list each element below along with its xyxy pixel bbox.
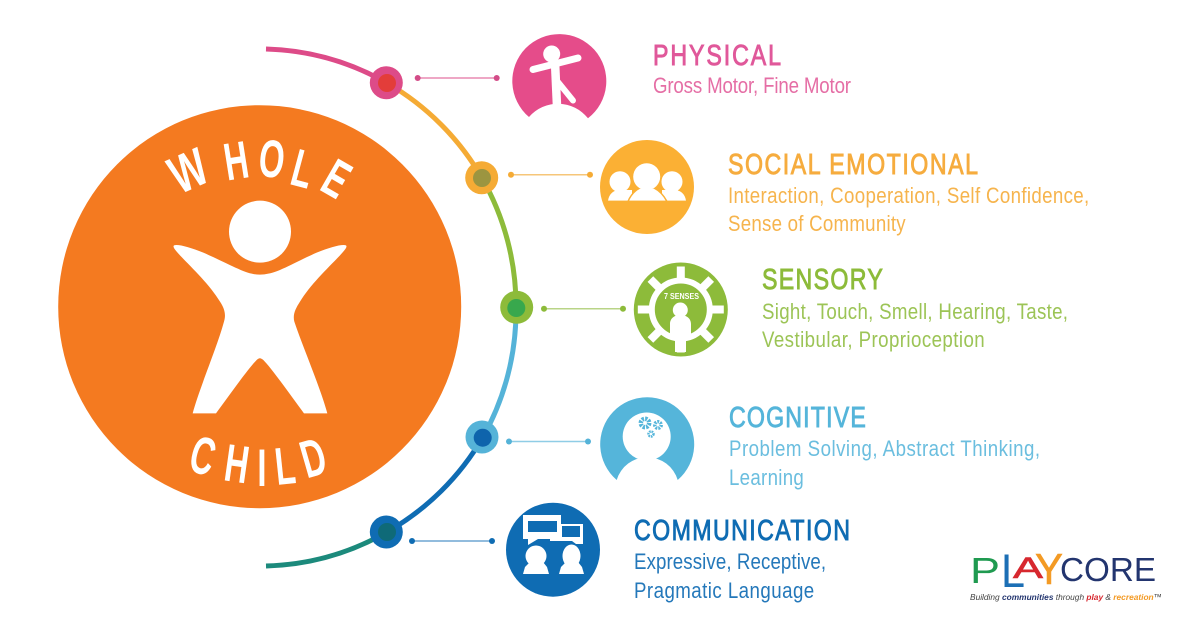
label: CHILD: H [221, 434, 253, 495]
connector: sensory [541, 306, 626, 312]
description: physical: Gross Motor, Fine Motor [653, 75, 851, 98]
connector: physical [415, 75, 500, 81]
description: cognitive: Problem Solving, Abstract Thinking, [729, 438, 1040, 461]
icon: physical [512, 34, 606, 118]
logo: PlayCore: A [1013, 552, 1043, 585]
icon: communication [506, 503, 600, 597]
heading: cognitive: COGNITIVE [729, 400, 866, 434]
icon label: 7 senses: 7 SENSES [664, 291, 699, 301]
arc: teal end [266, 532, 387, 566]
text: social emotional [728, 147, 1089, 236]
text: physical [653, 38, 851, 98]
child figure [174, 201, 346, 413]
node: communication [370, 516, 403, 548]
icon: cognitive [600, 397, 694, 480]
arc: physical [266, 49, 387, 83]
text: communication: Pragmatic Language [634, 580, 814, 603]
arc: social emotional [387, 83, 482, 178]
node: cognitive [466, 420, 498, 454]
icon: sensory [634, 262, 728, 356]
segmented arc with nodes [266, 49, 516, 566]
arc: sensory [482, 178, 516, 308]
arc: cognitive [483, 308, 516, 437]
text: communication [634, 513, 850, 603]
logo: PlayCore: Y [1035, 545, 1063, 594]
description: sensory: Sight, Touch, Smell, Hearing, Taste, [762, 301, 1068, 324]
arc: communication [387, 437, 483, 532]
text: sensory [762, 262, 1068, 352]
description: social emotional: Interaction, Cooperation, Self Confidence, [728, 185, 1089, 208]
whole child badge [58, 105, 461, 508]
text: cognitive [729, 400, 1040, 490]
heading: communication: COMMUNICATION [634, 513, 850, 547]
description: communication: Expressive, Receptive, [634, 551, 826, 574]
node: social emotional [465, 161, 498, 194]
label: CHILD: D [294, 427, 333, 490]
text: sensory: Vestibular, Proprioception [762, 329, 985, 352]
heading: social emotional: SOCIAL EMOTIONAL [728, 147, 978, 181]
label: WHOLE: H [220, 131, 253, 192]
label: CHILD: C [184, 425, 222, 488]
label: WHOLE: W [160, 136, 217, 205]
connector: cognitive [506, 438, 591, 444]
logo tagline: Building communities through play & recreation™ [970, 592, 1162, 602]
connector: communication [409, 538, 495, 544]
label: CHILD: I [257, 439, 267, 498]
label: WHOLE: O [256, 129, 288, 190]
node: physical [370, 66, 403, 99]
label: WHOLE [160, 129, 360, 210]
text: cognitive: Learning [729, 467, 804, 490]
label: WHOLE: L [285, 138, 320, 201]
logo: PlayCore [970, 544, 1162, 602]
heading: physical: PHYSICAL [653, 38, 781, 72]
label: WHOLE: E [312, 148, 360, 210]
heading: sensory: SENSORY [762, 262, 883, 296]
logo: PlayCore: CORE [1060, 551, 1156, 588]
icon: social emotional [600, 140, 694, 234]
connector: social emotional [508, 172, 593, 178]
label: CHILD [184, 425, 333, 498]
logo: PlayCore: P [970, 550, 1000, 591]
text: social emotional: Sense of Community [728, 213, 906, 236]
orange circle [58, 105, 461, 508]
logo: PlayCore: L [1001, 544, 1025, 597]
label: CHILD: L [272, 436, 298, 497]
node: sensory [500, 291, 533, 324]
